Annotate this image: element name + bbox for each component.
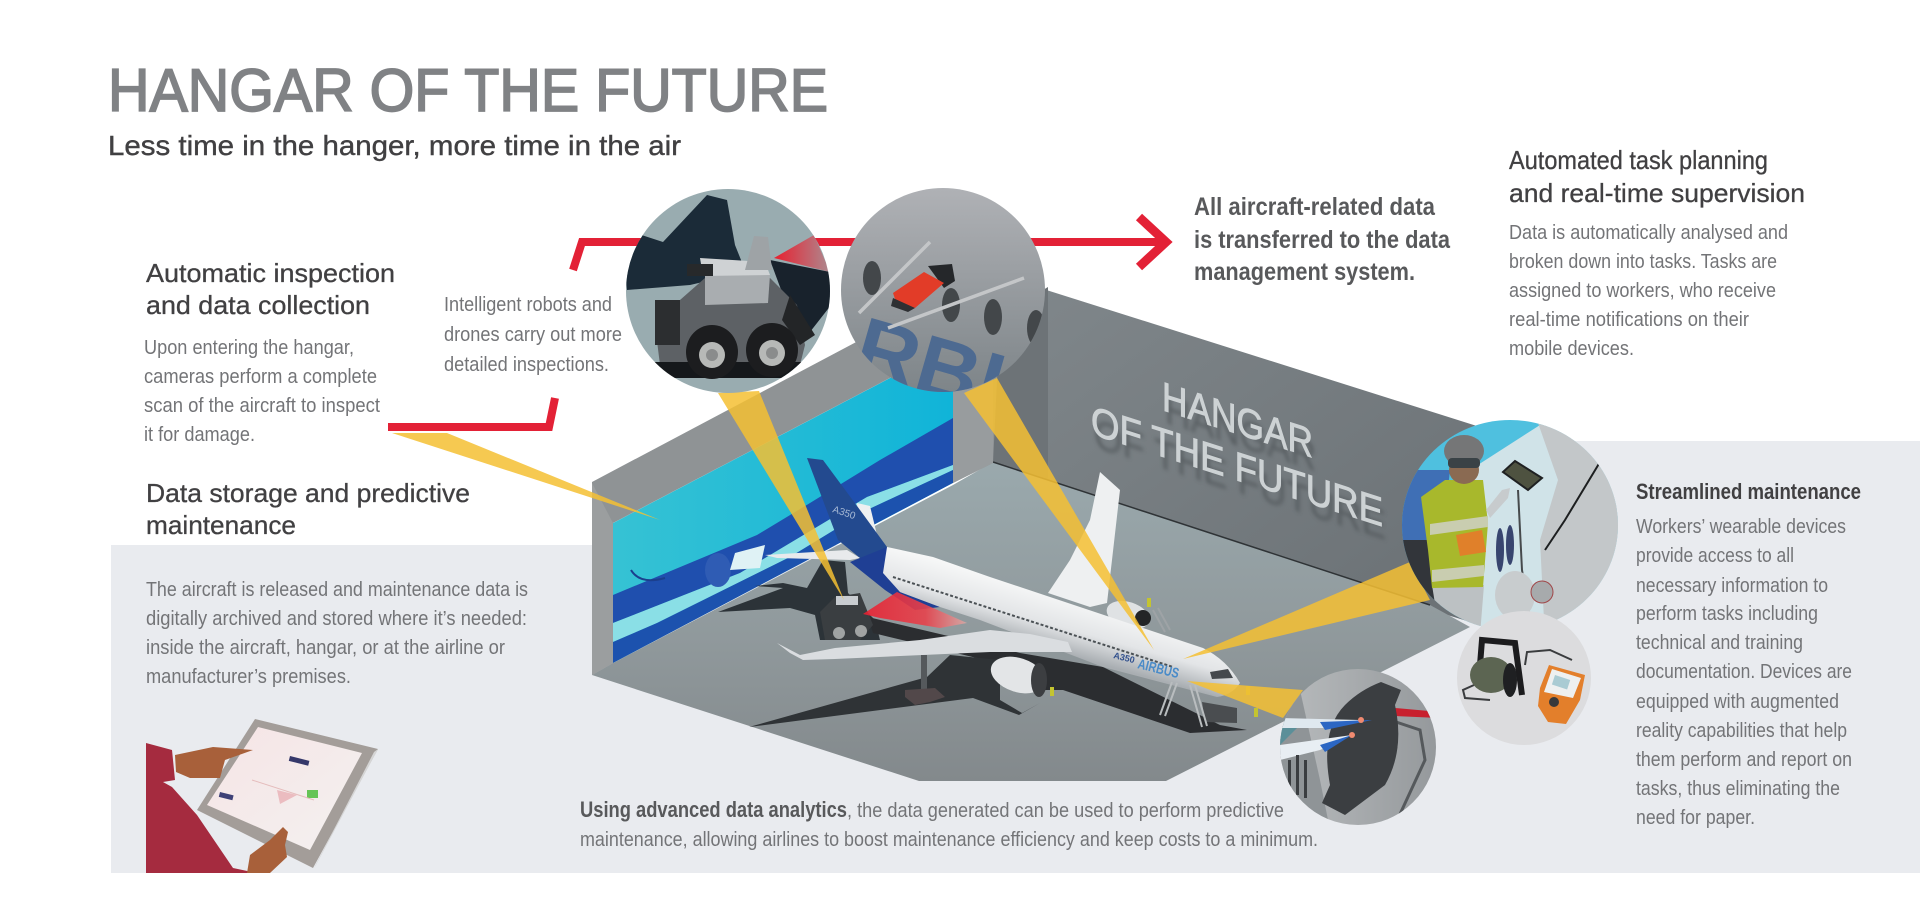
device: reel	[1463, 640, 1572, 700]
circle: worker close-up	[1402, 420, 1618, 626]
worker	[1432, 585, 1484, 626]
windows	[863, 261, 1045, 346]
tablet frame	[197, 719, 378, 868]
circle: robot close-up	[626, 189, 830, 393]
fuselage	[883, 547, 1240, 697]
text block: data transfer: All aircraft-related data	[1194, 193, 1436, 221]
text block: automatic inspection: scan of the aircraft to inspect	[144, 394, 380, 417]
window line	[893, 577, 1173, 667]
small robot	[820, 593, 873, 640]
wing shadow	[749, 655, 1040, 727]
text block: robots and drones: Intelligent robots and	[444, 293, 612, 316]
device: handheld	[1538, 665, 1585, 724]
text block: data storage: The aircraft is released and maintenance data is	[146, 578, 528, 601]
text block: data transfer	[1194, 193, 1451, 286]
illustration: tablet in hands	[146, 719, 378, 873]
tail shadow	[718, 560, 880, 640]
text block: data storage	[146, 478, 528, 688]
robot body	[655, 278, 805, 365]
fin	[807, 458, 890, 575]
text block: streamlined maintenance: Workers’ wearable devices	[1636, 515, 1846, 538]
wheels	[686, 325, 738, 379]
text block: automatic inspection: Automatic inspection	[146, 258, 395, 288]
hangar door strip	[993, 287, 1048, 482]
illustration: aircraft	[718, 458, 1258, 733]
tail label: A350	[831, 504, 857, 522]
text block: data storage: digitally archived and stored where it’s needed:	[146, 607, 527, 630]
text block: predictive analytics: maintenance, allowing airlines to boost maintenance efficiency and keep costs to a minimum.	[580, 828, 1318, 851]
text block: streamlined maintenance: Streamlined maintenance	[1636, 479, 1861, 504]
text block: streamlined maintenance: technical and training	[1636, 631, 1803, 654]
tablet screen	[207, 727, 362, 850]
text block: data storage: Data storage and predictive	[146, 478, 470, 508]
text block: automatic inspection	[144, 258, 395, 446]
text block: task planning: real-time notifications on their	[1509, 308, 1749, 331]
far engine	[1103, 596, 1153, 634]
text block: task planning: mobile devices.	[1509, 337, 1634, 360]
text block: automatic inspection: it for damage.	[144, 423, 255, 446]
panel: grey background	[111, 441, 1920, 873]
near engine	[986, 650, 1050, 700]
far stabiliser	[857, 503, 877, 560]
text block: streamlined maintenance: tasks, thus eliminating the	[1636, 777, 1840, 800]
text block: predictive analytics: , the data generated can be used to perform predictive	[847, 799, 1284, 822]
text block: task planning: Data is automatically analysed and	[1509, 221, 1788, 244]
text block: data transfer: is transferred to the data	[1194, 226, 1451, 254]
wall sign: of the future: OF THE FUTURE	[1094, 410, 1386, 548]
text block: streamlined maintenance: documentation. Devices are	[1636, 660, 1852, 683]
side wall	[592, 318, 1000, 675]
text block: task planning: Automated task planning	[1509, 145, 1768, 175]
nose door steps	[1160, 682, 1207, 727]
circle: drone close-up	[841, 188, 1045, 392]
text block: data transfer: management system.	[1194, 258, 1415, 286]
airbus lettering: AIRBUS	[1136, 655, 1181, 681]
upper hand	[175, 747, 253, 778]
text block: robots and drones	[444, 293, 622, 376]
text block: streamlined maintenance: provide access to all	[1636, 544, 1794, 567]
floor	[592, 462, 1470, 781]
text block: task planning: broken down into tasks. Tasks are	[1509, 250, 1777, 273]
text block: data storage: manufacturer’s premises.	[146, 665, 351, 688]
text block: task planning: and real-time supervision	[1509, 178, 1805, 208]
text block: streamlined maintenance: perform tasks including	[1636, 602, 1818, 625]
text block: task planning: assigned to workers, who receive	[1509, 279, 1776, 302]
cockpit	[1210, 669, 1233, 679]
far wing	[1048, 472, 1120, 607]
arrow: data transfer	[573, 217, 1166, 270]
lower hand	[247, 827, 288, 873]
subtitle: Less time in the hanger, more time in the air	[108, 130, 681, 161]
sleeve and body	[146, 743, 257, 873]
near wing	[777, 630, 1072, 660]
text block: automatic inspection: cameras perform a complete	[144, 365, 377, 388]
underbody shadow	[868, 617, 1247, 733]
connector: camera scan	[388, 398, 555, 427]
belly	[850, 547, 940, 610]
illustration: aircraft: A350	[1113, 650, 1136, 665]
fuselage lettering: RBI	[845, 299, 1015, 431]
text block: streamlined maintenance	[1636, 479, 1861, 829]
wall sign: hangar: HANGAR	[1165, 386, 1316, 480]
drone	[859, 242, 1024, 328]
text block: streamlined maintenance: them perform and report on	[1636, 748, 1852, 771]
text block: predictive analytics: Using advanced data analytics	[580, 797, 847, 822]
text block: streamlined maintenance: equipped with augmented	[1636, 690, 1839, 713]
text block: data storage: maintenance	[146, 510, 296, 540]
wall sign: of the future: OF THE FUTURE	[1091, 397, 1383, 535]
mural	[613, 378, 953, 663]
beams: inspection highlights	[392, 378, 1430, 718]
far stairs	[1153, 608, 1170, 632]
text block: task planning	[1509, 145, 1805, 360]
text block: automatic inspection: Upon entering the hangar,	[144, 336, 354, 359]
text block: predictive analytics	[580, 797, 1318, 851]
circle: smart watch	[1278, 665, 1440, 830]
text block: automatic inspection: and data collection	[146, 290, 370, 320]
red scan fan	[863, 592, 967, 628]
text block: robots and drones: drones carry out more	[444, 323, 622, 346]
ground crew	[1050, 598, 1258, 717]
text block: data storage: inside the aircraft, hangar, or at the airline or	[146, 636, 505, 659]
text block: streamlined maintenance: reality capabilities that help	[1636, 719, 1847, 742]
text block: streamlined maintenance: need for paper.	[1636, 806, 1755, 829]
back wall	[1040, 288, 1480, 625]
text block: streamlined maintenance: necessary information to	[1636, 574, 1828, 597]
circle: wearable device	[1457, 611, 1591, 745]
wall sign: hangar: HANGAR	[1162, 373, 1313, 467]
illustration: hangar building	[592, 287, 1480, 781]
landing gear	[921, 655, 927, 693]
title: HANGAR OF THE FUTURE	[108, 57, 828, 124]
text block: robots and drones: detailed inspections.	[444, 353, 609, 376]
stabiliser	[765, 550, 860, 560]
